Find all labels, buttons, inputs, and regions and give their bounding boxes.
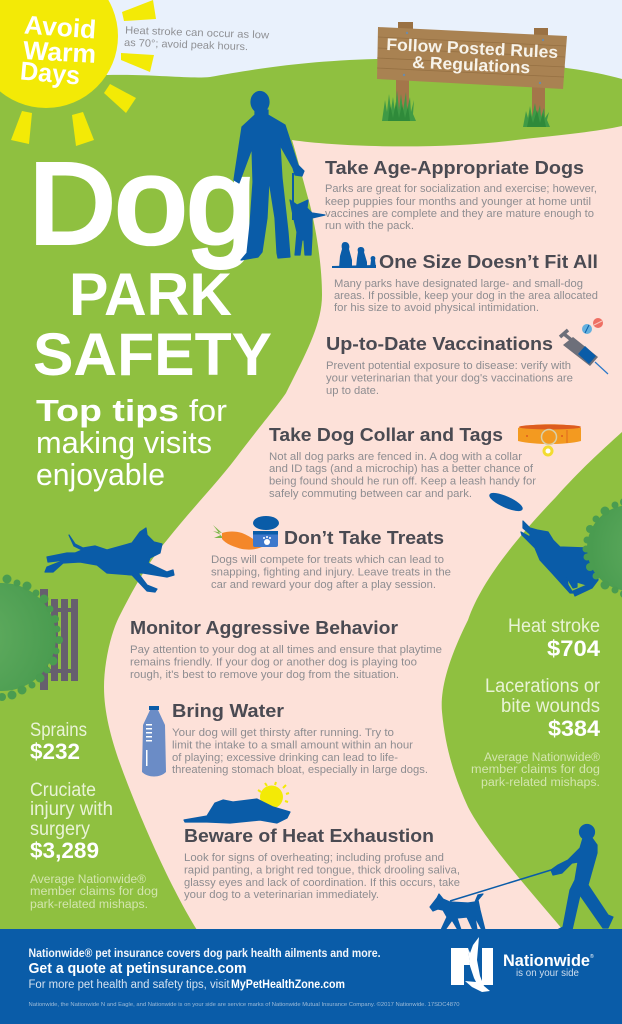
stats: left: $3,289: [30, 838, 99, 863]
icon: frisbee: [488, 490, 524, 514]
sign: follow posted rules: Follow Posted Rules: [386, 35, 559, 62]
logo: Nationwide wordmark: ®: [590, 953, 594, 960]
tip: collar and tags: and ID tags (and a microchip) has a better chance of: [269, 463, 534, 475]
stats: left: $232: [30, 739, 80, 764]
stats: right: member claims for dog: [471, 764, 600, 776]
title: dog: D: [29, 140, 115, 266]
footer text: For more pet health and safety tips, visit: [28, 979, 230, 991]
tip: collar and tags: Take Dog Collar and Tags: [269, 425, 503, 445]
heading: avoid warm days: Warm: [22, 35, 97, 69]
sign: follow posted rules: [377, 22, 567, 127]
bush: left: [0, 574, 63, 701]
title: dog: o: [115, 134, 187, 268]
tip: aggressive behavior: remains friendly. If your dog or another dog is playing too: [130, 656, 417, 668]
title: dog: [29, 134, 255, 268]
tip: collar and tags: Not all dog parks are fenced in. A dog with a collar: [269, 451, 522, 463]
tip: heat exhaustion: Look for signs of overheating; including profuse and: [184, 852, 444, 864]
tip: collar and tags: safely commuting between car and park.: [269, 488, 472, 500]
stats: right: Lacerations or: [485, 676, 601, 697]
icon: syringe and pills: [560, 318, 608, 374]
text: heat stroke note: Heat stroke can occur as low: [125, 24, 270, 42]
tip: age-appropriate dogs: keep puppies four months and younger at home until: [325, 196, 591, 208]
stats: right: $704: [547, 636, 601, 661]
tip: aggressive behavior: Monitor Aggressive Behavior: [130, 618, 398, 638]
footer text: Nationwide® pet insurance covers dog park health ailments and more.: [28, 948, 380, 960]
sun with rays: [0, 0, 156, 146]
stats: left: Sprains: [30, 720, 87, 741]
tip: age-appropriate dogs: Take Age-Appropriate Dogs: [325, 158, 584, 178]
footer text: MyPetHealthZone.com: [231, 979, 345, 991]
winding pink path: [104, 126, 622, 930]
icon: collar: [518, 424, 581, 456]
tip: heat exhaustion: Beware of Heat Exhaustion: [184, 826, 434, 846]
footer text: Nationwide, the Nationwide N and Eagle, and Nationwide is on your side are service marks of Nationwide Mutual Insurance Company. ©2017 Nationwide. 17SDC4870: [28, 1001, 460, 1008]
tip: one size: for his size to avoid physical intimidation.: [334, 302, 539, 314]
tip: treats: car and reward your dog after a play session.: [211, 579, 436, 591]
bush: right: [582, 498, 622, 598]
tip: collar and tags: [269, 425, 536, 500]
title: park: PARK: [69, 261, 232, 328]
tip: treats: Dogs will compete for treats which can lead to: [211, 554, 444, 566]
logo: Nationwide N and eagle: [451, 937, 493, 992]
tip: aggressive behavior: rough, it's best to remove your dog from the situation.: [130, 669, 399, 681]
title: dog: g: [187, 134, 255, 268]
tip: bring water: threatening stomach bloat, especially in large dogs.: [172, 764, 428, 776]
stats: left: Average Nationwide®: [30, 874, 147, 886]
stats: left: injury with: [30, 799, 113, 820]
tip: collar and tags: being found should he run off. Keep a leash handy for: [269, 476, 536, 488]
tip: treats: Don’t Take Treats: [284, 528, 444, 548]
tip: vaccinations: up to date.: [326, 385, 379, 397]
tip: heat exhaustion: [184, 826, 460, 901]
stats: right: $384: [548, 716, 601, 741]
fence: [40, 589, 78, 690]
stats: right: Heat stroke: [508, 616, 600, 637]
tip: heat exhaustion: rapid panting, a bright red tongue, thick drooling saliva,: [184, 864, 460, 876]
tip: bring water: limit the intake to a small amount within an hour: [172, 740, 413, 752]
logo: Nationwide wordmark: Nationwide: [503, 952, 590, 970]
icon: dog lying in the sun: [184, 782, 290, 823]
stats: left: Cruciate: [30, 780, 96, 801]
stats: right: park-related mishaps.: [481, 777, 600, 789]
stats: left: [30, 720, 158, 911]
tip: bring water: Bring Water: [172, 701, 284, 721]
icon: treat can: [253, 516, 279, 547]
subtitle: making visits: [36, 425, 212, 460]
tip: one size: Many parks have designated large- and small-dog: [334, 278, 583, 290]
tip: heat exhaustion: your dog to a veterinarian immediately.: [184, 889, 379, 901]
silhouette: walking man and dog on leash: [430, 824, 613, 930]
tip: bring water: Your dog will get thirsty after running. Try to: [172, 727, 394, 739]
tip: heat exhaustion: glassy eyes and lack of coordination. If this occurs, take: [184, 877, 460, 889]
heading: avoid warm days: Days: [19, 55, 81, 91]
text: heat stroke note: [124, 24, 270, 53]
subtitle: [36, 393, 227, 492]
tip: treats: [211, 528, 451, 591]
tip: vaccinations: Prevent potential exposure to disease: verify with: [326, 360, 571, 372]
subtitle: Top tips: [36, 393, 179, 428]
heading: avoid warm days: Avoid: [23, 10, 97, 44]
stats: left: park-related mishaps.: [30, 899, 148, 911]
title: safety: SAFETY: [33, 321, 272, 388]
icon: carrot: [213, 525, 262, 550]
stats: right: Average Nationwide®: [484, 752, 601, 764]
tip: vaccinations: Up-to-Date Vaccinations: [326, 334, 553, 354]
tip: vaccinations: [326, 334, 573, 397]
tip: one size: areas. If possible, keep your dog in the area allocated: [334, 290, 598, 302]
silhouette: leaping dog right: [521, 521, 598, 596]
footer text: Get a quote at petinsurance.com: [28, 960, 246, 977]
tip: treats: snapping, fighting and injury. Leave treats in the: [211, 566, 451, 578]
logo: Nationwide wordmark: [503, 952, 594, 979]
stats: left: member claims for dog: [30, 886, 158, 898]
tip: vaccinations: your veterinarian that your dog's vaccinations are: [326, 372, 573, 384]
stats: right: bite wounds: [501, 696, 600, 717]
silhouette: leaping dog left: [45, 528, 174, 592]
tip: bring water: [172, 701, 428, 776]
icon: small dogs: [332, 242, 376, 268]
icon: water bottle: [142, 706, 166, 776]
subtitle: for: [189, 393, 227, 428]
logo: Nationwide wordmark: is on your side: [516, 968, 579, 979]
footer band: [0, 929, 622, 1024]
sign: follow posted rules: & Regulations: [412, 53, 531, 77]
silhouette: man with dog: [234, 92, 325, 260]
footer text: [28, 948, 460, 1008]
tip: aggressive behavior: [130, 618, 442, 681]
subtitle: enjoyable: [36, 457, 165, 492]
stats: left: surgery: [30, 819, 90, 840]
stats: right: [471, 616, 601, 789]
tip: one size: [334, 252, 598, 314]
tip: one size: One Size Doesn’t Fit All: [379, 252, 598, 272]
tip: age-appropriate dogs: run with the pack.: [325, 220, 414, 232]
tip: bring water: of playing; excessive drinking can lead to life-: [172, 752, 398, 764]
heading: avoid warm days: [19, 10, 97, 91]
tip: age-appropriate dogs: Parks are great for socialization and exercise; however,: [325, 183, 597, 195]
tip: age-appropriate dogs: vaccines are complete and they are mature enough to: [325, 208, 594, 220]
tip: aggressive behavior: Pay attention to your dog at all times and ensure that playtime: [130, 644, 442, 656]
text: heat stroke note: as 70°; avoid peak hours.: [124, 37, 248, 53]
tip: age-appropriate dogs: [325, 158, 597, 232]
